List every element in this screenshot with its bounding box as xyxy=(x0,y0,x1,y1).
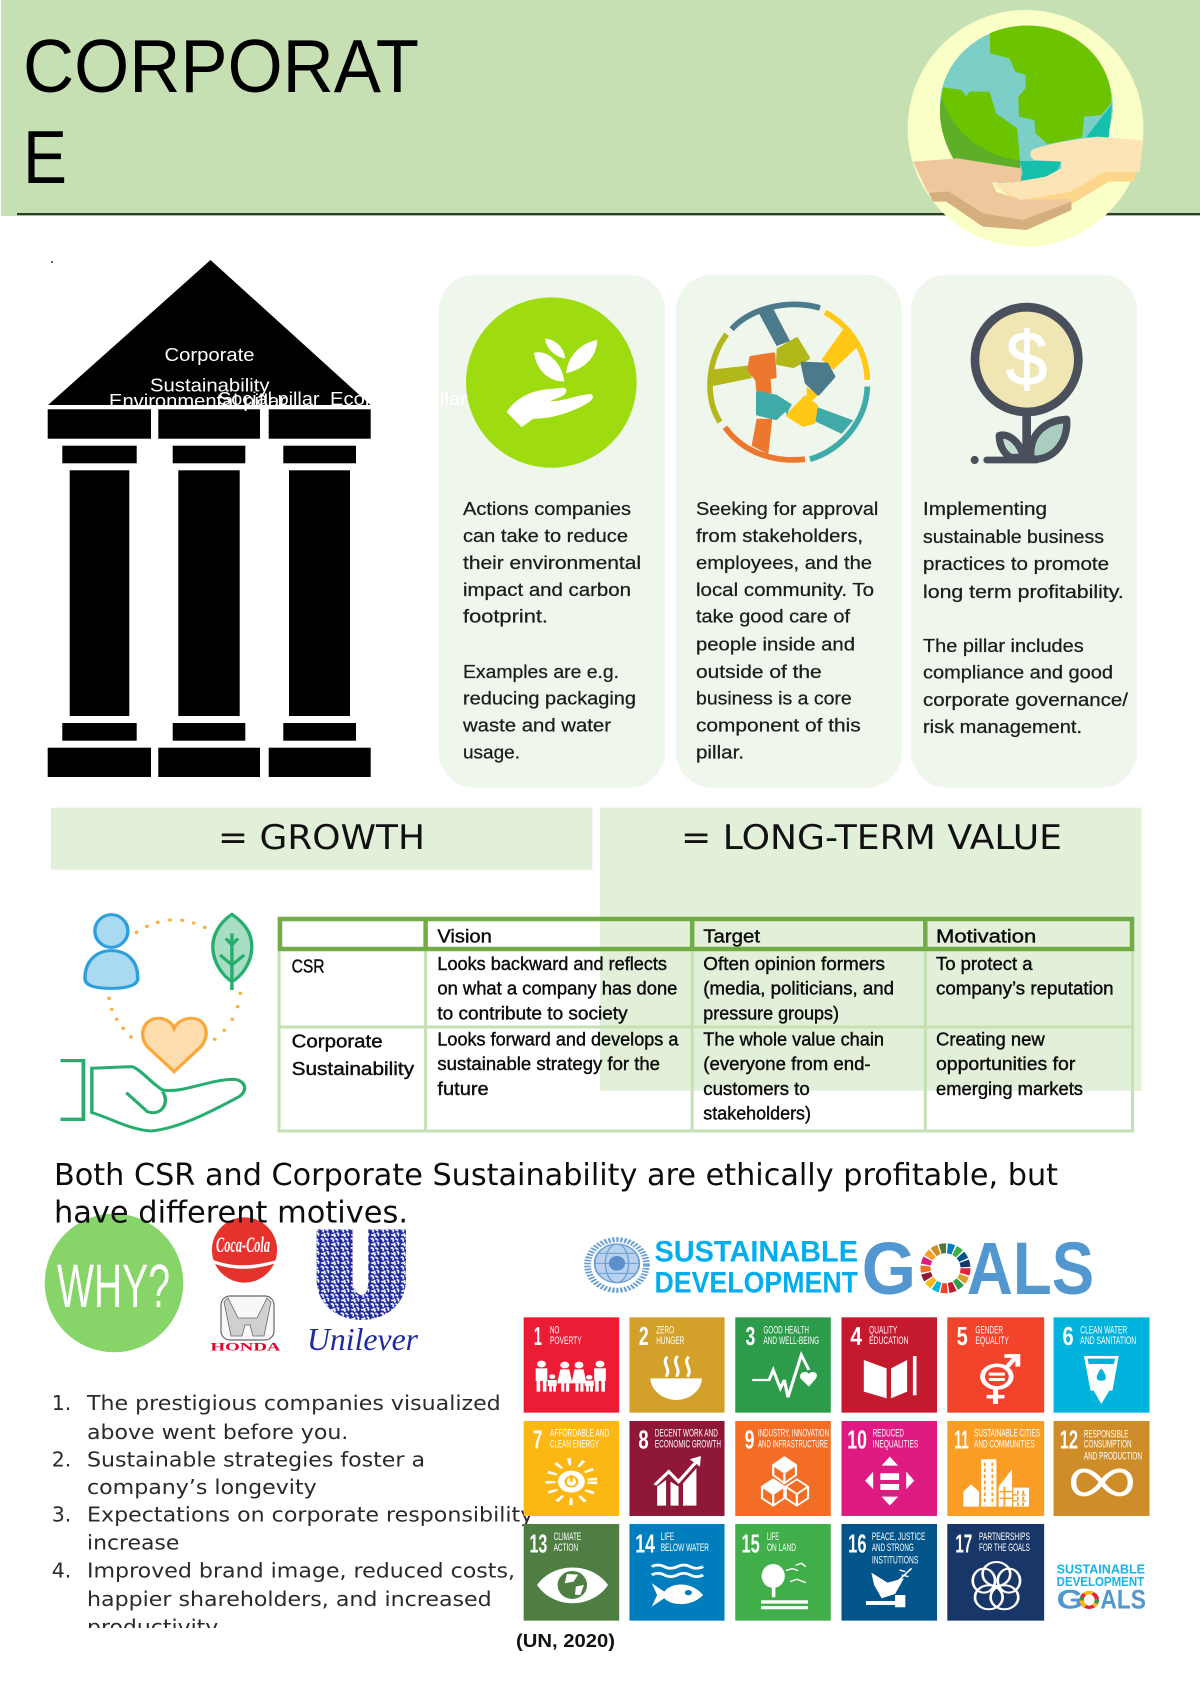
text: temple labels: Sustainability xyxy=(150,376,270,396)
numbered list of reasons: 3. xyxy=(52,1503,71,1527)
table motivation column: Creating new xyxy=(936,1029,1046,1049)
table: CSR vs corporate sustainability xyxy=(279,919,1132,1131)
text: economic pillar description: The pillar includes xyxy=(923,636,1084,656)
grid of 17 SDG tiles: ECONOMIC GROWTH xyxy=(655,1437,721,1450)
header band xyxy=(1,0,1200,216)
small sustainable development goals logo: DEVELOPMENT xyxy=(1057,1575,1144,1589)
table header text xyxy=(437,927,1036,947)
tile 8: decent work xyxy=(629,1421,725,1516)
tile 11: sustainable cities: 11 xyxy=(954,1425,969,1454)
tile 14: life below water: BELOW WATER xyxy=(661,1541,709,1554)
text: temple labels xyxy=(109,345,467,411)
grid of 17 SDG tiles: INDUSTRY, INNOVATION xyxy=(758,1426,829,1439)
panel: economic pillar xyxy=(911,275,1137,788)
grid of 17 SDG tiles: DECENT WORK AND xyxy=(655,1426,718,1439)
text: social pillar description xyxy=(696,499,878,762)
tile 15: life on land xyxy=(735,1524,831,1621)
table vision column: to contribute to society xyxy=(437,1003,628,1023)
tile 6: clean water: CLEAN WATER xyxy=(1080,1323,1127,1336)
citation: (UN, 2020) xyxy=(516,1631,615,1651)
tile 13: climate action: 13 xyxy=(529,1529,547,1558)
numbered list of reasons: increase xyxy=(87,1530,179,1554)
tile 7: affordable and clean energy xyxy=(524,1421,619,1516)
numbered list of reasons: 2. xyxy=(52,1448,71,1472)
numbered list of reasons: happier shareholders, and increased xyxy=(87,1587,492,1611)
logo: Honda: HONDA xyxy=(210,1340,281,1354)
tile 8: decent work: 8 xyxy=(638,1425,649,1454)
small sustainable development goals logo xyxy=(1057,1562,1146,1614)
table vision column xyxy=(437,954,679,1099)
tile 9: industry and innovation xyxy=(735,1421,831,1516)
tile 1: no poverty: NO xyxy=(550,1323,559,1336)
icon: why circle: WHY? xyxy=(57,1252,170,1320)
statement text: Both CSR and Corporate Sustainability are ethically profitable, but xyxy=(54,1158,1058,1193)
logo: Coca-Cola xyxy=(212,1217,277,1283)
text: social pillar description: pillar. xyxy=(696,742,744,762)
icon: earth held by two hands xyxy=(908,10,1143,247)
icon: person, leaf, heart and hand xyxy=(60,914,252,1131)
text: economic pillar description: corporate governance/ xyxy=(923,690,1128,710)
tile 13: climate action: CLIMATE xyxy=(554,1530,581,1543)
tile 16: peace and justice xyxy=(841,1524,937,1621)
tile 7: affordable and clean energy: 7 xyxy=(533,1425,542,1454)
table target column: pressure groups) xyxy=(703,1003,839,1023)
table header text: Target xyxy=(703,927,760,947)
numbered list of reasons: Sustainable strategies foster a xyxy=(87,1448,425,1472)
tile 15: life on land: ON LAND xyxy=(767,1541,796,1554)
numbered list of reasons: above went before you. xyxy=(87,1420,348,1444)
tile 14: life below water: 14 xyxy=(635,1529,655,1558)
tile 5: gender equality: EQUALITY xyxy=(975,1334,1009,1347)
small sustainable development goals logo: ALS xyxy=(1100,1584,1146,1614)
text: environmental pillar description: can take to reduce xyxy=(463,526,628,546)
tile 7: affordable and clean energy: AFFORDABLE AND xyxy=(550,1426,609,1439)
temple with three pillars xyxy=(48,260,467,777)
table target column: stakeholders) xyxy=(703,1103,811,1123)
text: social pillar description: take good care of xyxy=(696,607,851,627)
table vision column: on what a company has done xyxy=(437,979,677,999)
text: social pillar description: employees, and the xyxy=(696,553,872,573)
tile 17: partnerships: 17 xyxy=(955,1529,972,1558)
text: temple labels: Corporate xyxy=(164,345,254,365)
text: social pillar description: people inside and xyxy=(696,634,855,654)
table vision column: Looks backward and reflects xyxy=(437,954,667,974)
numbered list of reasons xyxy=(52,1391,533,1639)
table target column: The whole value chain xyxy=(703,1029,884,1049)
table row labels: CSR xyxy=(292,957,325,977)
tile 1: no poverty: 1 xyxy=(534,1321,542,1351)
title: E xyxy=(23,115,67,199)
table target column: (everyone from end- xyxy=(703,1054,871,1074)
tile 4: quality education: 4 xyxy=(850,1321,862,1351)
tile 13: climate action: ACTION xyxy=(554,1541,578,1554)
text: temple labels: Economic pillar xyxy=(330,389,467,409)
panel: environmental pillar xyxy=(439,275,665,788)
tile 17: partnerships: PARTNERSHIPS xyxy=(979,1530,1030,1543)
table target column: (media, politicians, and xyxy=(703,979,894,999)
tile 3: good health: 3 xyxy=(746,1321,755,1351)
table motivation column: emerging markets xyxy=(936,1079,1083,1099)
tile 12: responsible consumption: RESPONSIBLE xyxy=(1084,1427,1129,1440)
text: environmental pillar description: Examples are e.g. xyxy=(463,662,619,682)
tile 5: gender equality: 5 xyxy=(957,1321,968,1351)
tile 11: sustainable cities xyxy=(947,1421,1044,1516)
text: goals wordmark: G xyxy=(862,1227,916,1310)
numbered list of reasons: productivity xyxy=(87,1615,218,1639)
tile 9: industry and innovation: 9 xyxy=(745,1425,754,1454)
text: social pillar description: outside of the xyxy=(696,662,822,682)
text: economic pillar description: risk management. xyxy=(923,717,1082,737)
table row labels: Sustainability xyxy=(292,1059,414,1079)
icon: hand holding plant xyxy=(466,297,637,468)
icon: dollar coin plant: $ xyxy=(1006,317,1048,402)
text: temple labels: Environmental pillar xyxy=(109,391,286,411)
table row labels xyxy=(292,957,414,1079)
text: economic pillar description: Implementing xyxy=(923,499,1047,519)
logo: Honda xyxy=(210,1296,281,1354)
table target column: Often opinion formers xyxy=(703,954,885,974)
tile 17: partnerships: FOR THE GOALS xyxy=(979,1541,1030,1554)
text: economic pillar description: practices to promote xyxy=(923,554,1109,574)
text: goals wordmark: ALS xyxy=(967,1227,1094,1310)
tile 5: gender equality xyxy=(947,1317,1044,1413)
tile 6: clean water: 6 xyxy=(1062,1321,1074,1351)
table vision column: sustainable strategy for the xyxy=(437,1054,660,1074)
tile 13: climate action xyxy=(524,1524,619,1621)
text: temple labels: Social pillar xyxy=(218,389,320,409)
panel: social pillar xyxy=(676,275,902,788)
tile 1: no poverty: POVERTY xyxy=(550,1334,582,1347)
grid of 17 SDG tiles: AND INFRASTRUCTURE xyxy=(758,1437,828,1450)
text: sustainable development: DEVELOPMENT xyxy=(654,1267,858,1299)
text: environmental pillar description: impact and carbon xyxy=(463,580,631,600)
table header text: Motivation xyxy=(936,927,1036,947)
logo: Unilever: Unilever xyxy=(307,1321,419,1357)
numbered list of reasons: Improved brand image, reduced costs, xyxy=(87,1558,515,1582)
table header text: Vision xyxy=(437,927,492,947)
text: environmental pillar description: Actions companies xyxy=(463,499,631,519)
tile 6: clean water xyxy=(1054,1317,1150,1413)
tile 6: clean water: AND SANITATION xyxy=(1080,1334,1136,1347)
numbered list of reasons: company’s longevity xyxy=(87,1475,317,1499)
tile 11: sustainable cities: AND COMMUNITIES xyxy=(974,1437,1035,1450)
small sustainable development goals logo: G xyxy=(1057,1584,1083,1614)
table motivation column: company’s reputation xyxy=(936,979,1114,999)
tile 3: good health: AND WELL-BEING xyxy=(763,1334,819,1347)
text: environmental pillar description: their environmental xyxy=(463,553,641,573)
tile 3: good health: GOOD HEALTH xyxy=(763,1323,809,1336)
small sustainable development goals logo: SUSTAINABLE xyxy=(1057,1562,1145,1577)
text: sustainable development: SUSTAINABLE xyxy=(654,1236,858,1268)
text: environmental pillar description xyxy=(462,499,641,762)
tile 5: gender equality: GENDER xyxy=(975,1323,1003,1336)
logo: Unilever xyxy=(307,1229,419,1357)
banner: long-term value: = LONG-TERM VALUE xyxy=(681,818,1062,858)
tile 12: responsible consumption xyxy=(1054,1421,1150,1516)
table target column: customers to xyxy=(703,1079,810,1099)
tile 10: reduced inequalities xyxy=(841,1421,937,1516)
text: social pillar description: from stakeholders, xyxy=(696,526,863,546)
logo: Sustainable Development Goals header xyxy=(587,1227,1094,1310)
tile 2: zero hunger: ZERO xyxy=(656,1323,674,1336)
tile 2: zero hunger xyxy=(629,1317,725,1413)
text: environmental pillar description: reducing packaging xyxy=(463,688,636,708)
grid of 17 SDG tiles: SUSTAINABLE CITIES xyxy=(974,1426,1040,1439)
tile 17: partnerships xyxy=(947,1524,1044,1621)
table motivation column: opportunities for xyxy=(936,1054,1075,1074)
statement text xyxy=(54,1158,1058,1230)
tile 7: affordable and clean energy: CLEAN ENERGY xyxy=(550,1437,599,1450)
icon: dollar coin plant xyxy=(971,307,1078,464)
text: environmental pillar description: waste and water xyxy=(462,716,611,736)
grid of 17 SDG tiles xyxy=(524,1317,1150,1621)
tile 14: life below water xyxy=(629,1524,725,1621)
tile 15: life on land: LIFE xyxy=(767,1530,779,1543)
tile 14: life below water: LIFE xyxy=(661,1530,674,1543)
text: social pillar description: component of this xyxy=(696,716,861,736)
numbered list of reasons: The prestigious companies visualized xyxy=(86,1391,501,1415)
tile 1: no poverty xyxy=(524,1317,619,1413)
text: economic pillar description xyxy=(923,499,1128,737)
tile 16: peace and justice: PEACE, JUSTICE xyxy=(872,1530,926,1543)
tile 10: reduced inequalities: 10 xyxy=(847,1425,867,1454)
tile 16: peace and justice: INSTITUTIONS xyxy=(872,1553,918,1566)
icon: circle of joined hands xyxy=(710,304,867,460)
title: CORPORAT xyxy=(23,24,419,108)
text: economic pillar description: long term profitability. xyxy=(923,582,1124,602)
banner: long-term value xyxy=(600,808,1142,1091)
table vision column: Looks forward and develops a xyxy=(437,1029,679,1049)
banner: growth: = GROWTH xyxy=(218,818,425,858)
banner: growth xyxy=(51,808,592,870)
table motivation column xyxy=(936,954,1114,1099)
tile 10: reduced inequalities: INEQUALITIES xyxy=(873,1437,918,1450)
statement text: have different motives. xyxy=(54,1195,408,1230)
tile 12: responsible consumption: CONSUMPTION xyxy=(1084,1437,1132,1450)
tile 4: quality education: QUALITY xyxy=(869,1323,897,1336)
tiny dot xyxy=(51,261,53,263)
icon: coloured goals ring xyxy=(926,1248,966,1288)
icon: why circle xyxy=(45,1214,183,1352)
table vision column: future xyxy=(437,1079,489,1099)
numbered list of reasons: 1. xyxy=(52,1391,71,1415)
text: social pillar description: business is a core xyxy=(696,688,852,708)
tile 2: zero hunger: 2 xyxy=(639,1321,649,1351)
text: goals wordmark xyxy=(862,1227,1094,1310)
tile 4: quality education: EDUCATION xyxy=(869,1334,908,1347)
tile 3: good health xyxy=(735,1317,831,1413)
tile 15: life on land: 15 xyxy=(742,1529,760,1558)
tile 10: reduced inequalities: REDUCED xyxy=(873,1426,904,1439)
text: social pillar description: local community. To xyxy=(696,580,874,600)
title xyxy=(23,24,419,199)
tile 2: zero hunger: HUNGER xyxy=(656,1334,684,1347)
table target column xyxy=(703,954,894,1123)
text: environmental pillar description: footprint. xyxy=(463,607,548,627)
icon: UN emblem xyxy=(587,1240,646,1290)
table motivation column: To protect a xyxy=(936,954,1034,974)
text: environmental pillar description: usage. xyxy=(463,742,520,762)
tile 12: responsible consumption: 12 xyxy=(1060,1425,1078,1454)
logo: Coca-Cola: Coca-Cola xyxy=(216,1232,270,1257)
tile 4: quality education xyxy=(841,1317,937,1413)
text: social pillar description: Seeking for approval xyxy=(696,499,878,519)
table row labels: Corporate xyxy=(292,1031,383,1051)
text: sustainable development xyxy=(654,1236,858,1299)
tile 16: peace and justice: AND STRONG xyxy=(872,1541,914,1554)
text: economic pillar description: sustainable business xyxy=(923,527,1104,547)
tile 16: peace and justice: 16 xyxy=(848,1529,866,1558)
numbered list of reasons: Expectations on corporate responsibility xyxy=(87,1503,533,1527)
text: economic pillar description: compliance and good xyxy=(923,662,1113,682)
numbered list of reasons: 4. xyxy=(52,1558,71,1582)
